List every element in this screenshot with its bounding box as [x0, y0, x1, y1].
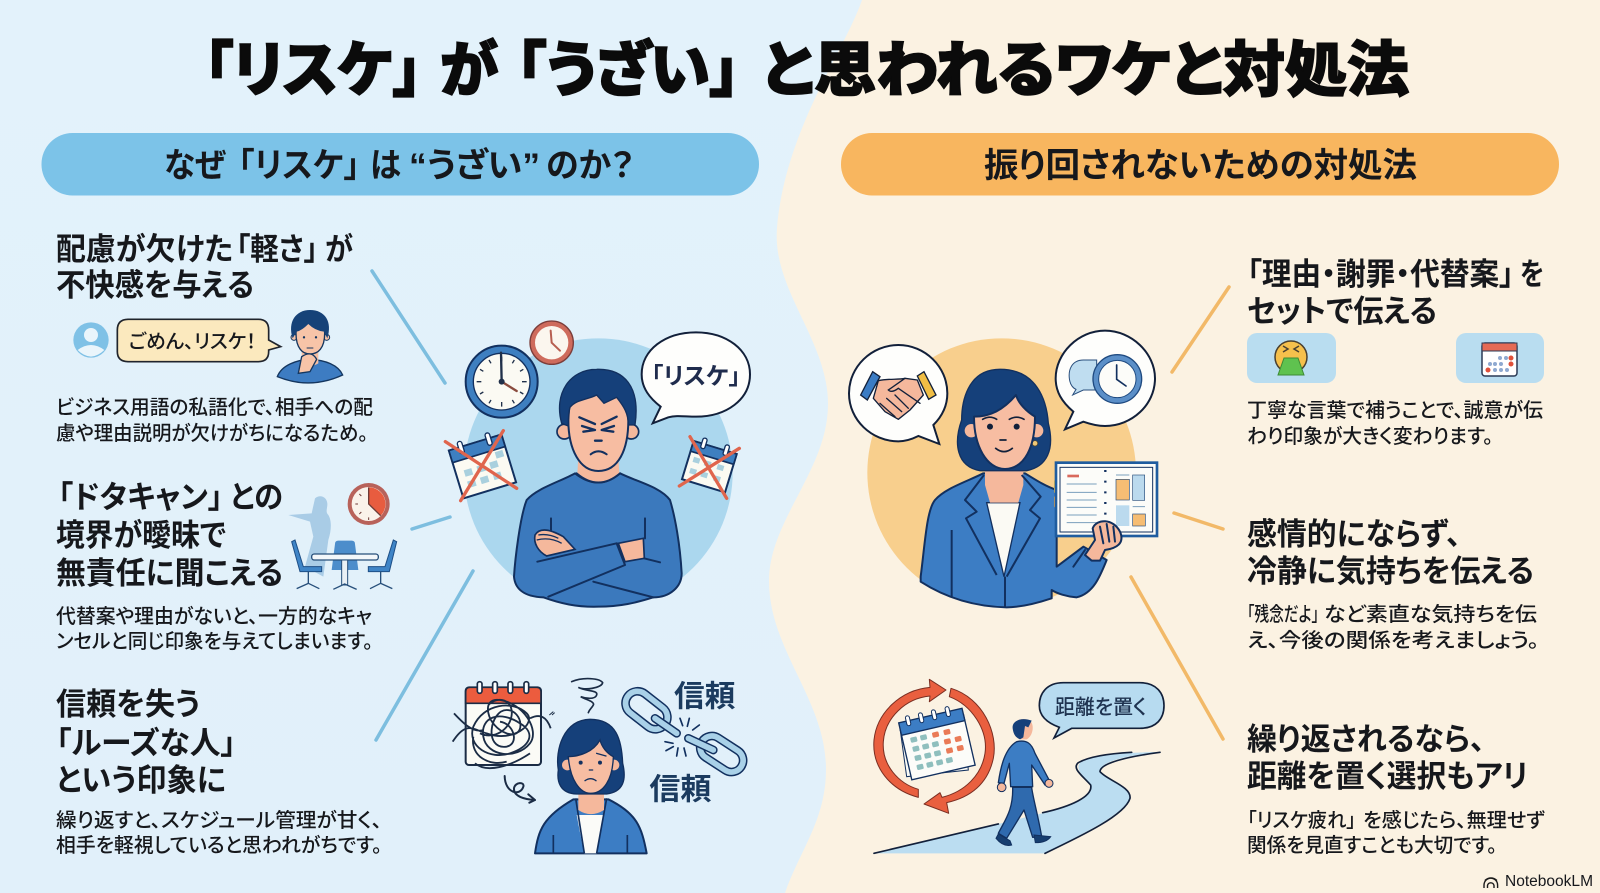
reason 1 heading: 配慮が欠けた — [56, 232, 233, 267]
tip 1 heading: セットで伝える — [1247, 294, 1437, 329]
tip 1 body text: 丁寧な言葉で補うことで、誠意が伝 — [1247, 399, 1543, 422]
speech bubble: handshake — [849, 345, 947, 444]
panel heading: why: “うざい” — [409, 146, 540, 185]
speech bubble: chat and clock — [1056, 331, 1155, 429]
panel heading: countermeasures: 振り回されないための対処法 — [984, 147, 1417, 185]
tip 3 body text: 「リスケ疲れ」 — [1247, 809, 1356, 832]
icon: user avatar — [73, 322, 109, 358]
icon: tangled calendar — [453, 682, 555, 768]
tip 2 body text: 「残念だよ」 — [1247, 603, 1319, 626]
reason 2 heading: 「ドタキャン」 — [58, 480, 223, 515]
panel heading: why: は — [370, 147, 401, 185]
ears — [965, 424, 978, 437]
icon: large clock — [466, 346, 538, 418]
tip 2 heading: 感情的にならず、 — [1247, 517, 1461, 552]
tip 1 heading — [1247, 257, 1544, 329]
tip 3 heading — [1247, 722, 1528, 794]
lapels — [952, 475, 1041, 607]
speech bubble: リスケ: 「リスケ」 — [651, 363, 741, 389]
woman figure — [921, 369, 1107, 607]
icon: red cross left — [445, 431, 517, 501]
reason 2 heading: 境界が曖昧で — [56, 518, 226, 553]
tip 1 heading: を — [1520, 257, 1544, 292]
title: 「リスケ」 — [204, 37, 422, 104]
leader lines left — [372, 271, 473, 740]
worried woman — [535, 719, 647, 853]
tip 3 body text: 関係を見直すことも大切です。 — [1247, 834, 1497, 857]
tip 2 body text: え、今後の関係を考えましょう。 — [1247, 629, 1539, 652]
earring — [1032, 441, 1038, 446]
blouse — [987, 503, 1020, 577]
neck — [985, 457, 1023, 503]
speech bubble: ごめん、リスケ！: ごめん、リスケ！ — [129, 331, 256, 353]
reason 2 body text — [56, 605, 373, 653]
ears — [557, 424, 572, 439]
icon: clock — [348, 483, 390, 525]
title: 思われるワケと対処法 — [814, 37, 1409, 104]
icon: red cross right — [679, 437, 739, 498]
bottom-right illustration: stepping away — [874, 679, 1164, 853]
tip 3 body text — [1247, 808, 1545, 857]
bottom-left illustration: tangled schedule and broken trust — [453, 679, 748, 853]
tip 3 heading: 繰り返されるなら、 — [1247, 722, 1485, 757]
reason 3 body text: 相手を軽視していると思われがちです。 — [56, 834, 382, 857]
neck — [577, 457, 619, 482]
tip 1 heading: 「理由・謝罪・代替案」 — [1247, 257, 1514, 292]
background circle — [867, 338, 1136, 607]
expression — [579, 417, 617, 441]
tip 1 body text — [1247, 399, 1543, 448]
reason 2 body text: ンセルと同じ印象を与えてしまいます。 — [56, 630, 373, 653]
tip 1 body text: わり印象が大きく変わります。 — [1247, 425, 1493, 448]
panel heading: why: のか？ — [546, 147, 634, 185]
hair back — [958, 369, 1051, 471]
sweater — [514, 473, 682, 607]
leader lines right — [1131, 287, 1229, 739]
icon: dizzy swirl — [572, 679, 603, 713]
reason 1 heading: 「軽さ」 — [236, 232, 318, 267]
icon: thinking man — [277, 310, 343, 383]
reason 1 body text — [56, 396, 373, 445]
central illustration: composed woman — [849, 331, 1157, 607]
tip 2 body text: など素直な気持ちを伝 — [1324, 603, 1537, 626]
tip 2 heading: 冷静に気持ちを伝える — [1247, 554, 1534, 589]
speech bubble: 距離を置く — [1039, 683, 1164, 738]
reason 1 heading: 不快感を与える — [56, 268, 254, 303]
walking person — [996, 719, 1053, 845]
speech bubble: 距離を置く: 距離を置く — [1055, 696, 1147, 719]
tip 2 heading — [1247, 517, 1534, 589]
icon: calendar pages — [898, 703, 975, 780]
tip 3 heading: 距離を置く選択もアリ — [1247, 759, 1528, 794]
face — [974, 395, 1035, 469]
label: 信頼 lower: 信頼 — [649, 773, 711, 806]
title — [204, 37, 1409, 104]
panel heading: why: なぜ — [164, 147, 227, 185]
reason 2 heading: との — [230, 480, 283, 515]
icon: fading person — [288, 496, 331, 577]
title: が — [440, 37, 498, 104]
folded arms — [535, 530, 575, 556]
reason 3 heading: という印象に — [56, 763, 226, 798]
reason 2 illustration: empty meeting — [288, 483, 397, 589]
panel heading: why — [42, 133, 759, 196]
hand holding notebook — [1085, 521, 1121, 561]
hair — [560, 369, 636, 426]
title: 「うざい」 — [516, 37, 740, 104]
icon: table and chairs — [292, 540, 397, 589]
face — [568, 393, 628, 471]
reason 3 heading — [56, 687, 236, 798]
reason 2 heading: 無責任に聞こえる — [56, 556, 283, 591]
panel heading: countermeasures — [841, 133, 1559, 196]
panel heading: why: 「リスケ」 — [238, 147, 360, 185]
reason 3 body text: 繰り返すと、スケジュール管理が甘く、 — [56, 809, 382, 832]
icon: notebook — [1054, 463, 1157, 536]
reason 1 heading: が — [325, 232, 353, 267]
speech bubble: リスケ — [642, 332, 750, 423]
reason 1 body text: 慮や理由説明が欠けがちになるため。 — [56, 422, 368, 445]
icon: cycle arrows — [874, 679, 994, 813]
tip 1 icon: sick face — [1247, 333, 1336, 383]
background: right cream panel — [769, 0, 1600, 893]
background circle — [464, 338, 733, 607]
icon: crossed calendar right — [682, 435, 738, 492]
central illustration: annoyed man — [445, 321, 750, 607]
icon: loop arrow — [505, 776, 535, 803]
icon: small clock — [530, 321, 573, 364]
icon: path — [874, 752, 1160, 853]
reason 3 heading: 「ルーズな人」 — [56, 726, 236, 761]
icon: broken chain — [621, 686, 748, 776]
reason 3 body text — [56, 809, 382, 857]
jacket — [921, 473, 1107, 607]
man figure — [514, 369, 682, 607]
tip 2 body text — [1247, 603, 1539, 652]
reason 1 heading — [56, 232, 353, 303]
reason 1 body text: ビジネス用語の私語化で、相手への配 — [56, 396, 373, 419]
tip 3 body text: を感じたら、無理せず — [1363, 808, 1545, 832]
speech bubble: ごめん、リスケ！ — [117, 319, 281, 362]
reason 2 heading — [56, 480, 283, 591]
footer: NotebookLM logo: NotebookLM — [1505, 873, 1593, 890]
label: 信頼 upper: 信頼 — [674, 681, 735, 714]
reason 1 illustration: casual reschedule — [73, 310, 343, 383]
title: と — [762, 37, 814, 104]
reason 2 body text: 代替案や理由がないと、一方的なキャ — [56, 605, 372, 628]
icon: crossed calendar left — [447, 429, 516, 498]
reason 3 heading: 信頼を失う — [56, 687, 200, 722]
tip 1 icon: calendar — [1456, 333, 1544, 383]
